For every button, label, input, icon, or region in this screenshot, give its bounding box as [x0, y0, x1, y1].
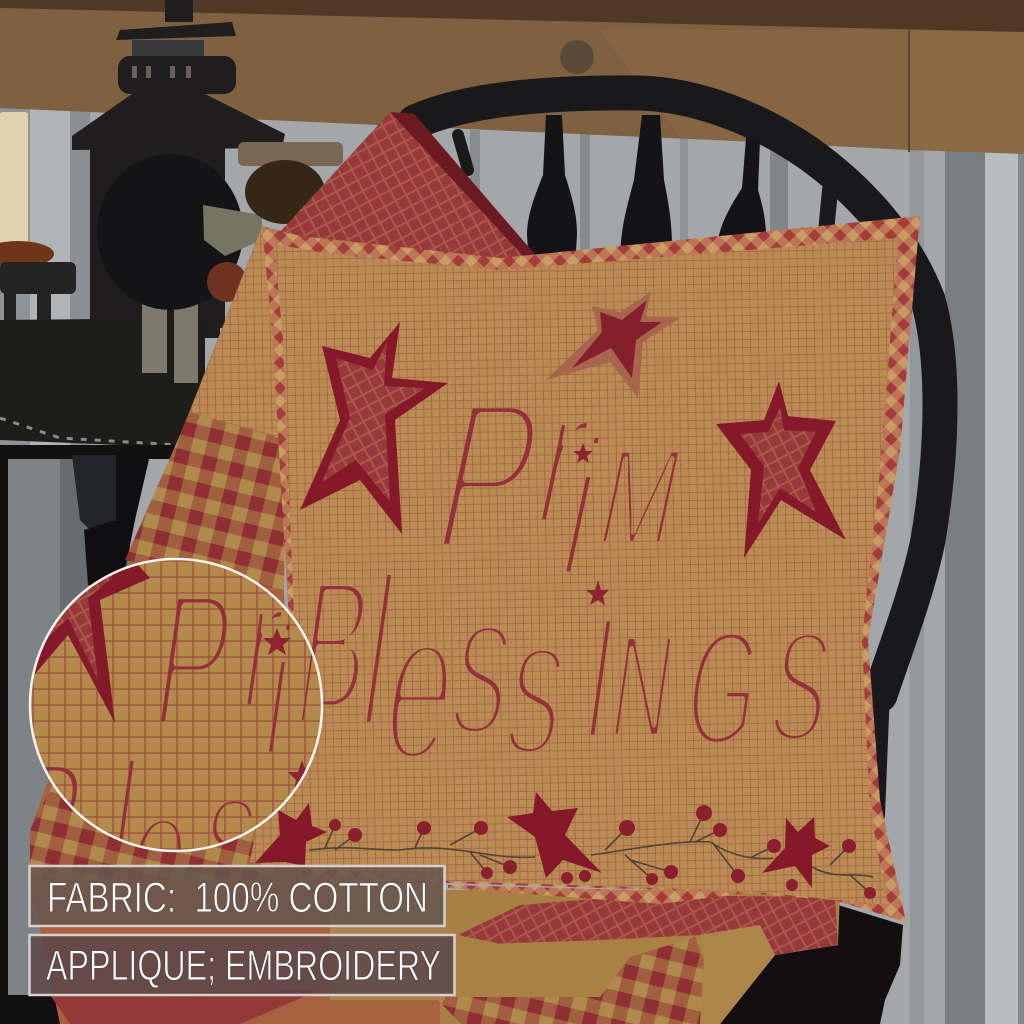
magnified stitched word: Prim: l	[292, 629, 322, 746]
label: fabric: FABRIC: 100% COTTON	[47, 874, 428, 922]
magnified stitched word: Blessings: s	[189, 727, 273, 939]
stitched heading: Blessings: B	[286, 542, 384, 751]
candle	[0, 112, 54, 267]
stitched heading: Prim: r	[519, 345, 610, 568]
star: bottom left	[255, 803, 327, 866]
quilt: red plaid fold	[458, 895, 838, 955]
back pillow: red plaid	[280, 112, 538, 258]
star: upper left	[300, 322, 448, 534]
label: applique and embroidery	[30, 935, 454, 995]
label: fabric	[30, 866, 444, 926]
stitched heading: Prim: i	[544, 397, 620, 620]
main pillow	[250, 216, 920, 922]
magnified stitched word: Prim: r	[230, 537, 297, 751]
quilt: tan right lobe	[700, 925, 775, 1024]
pillow checked border	[262, 216, 920, 922]
star: bottom centre	[507, 792, 602, 878]
chair seat	[720, 905, 903, 1024]
stitched heading: Blessings: l	[348, 529, 409, 775]
wood beam	[0, 0, 1024, 154]
stitched heading: Prim: M	[586, 419, 695, 575]
chair back	[415, 93, 940, 815]
pillow bottom checked hem	[448, 885, 747, 904]
stitched heading: Blessings: I	[572, 579, 628, 779]
magnified stitched word: Blessings: l	[94, 720, 151, 943]
star: small centre	[573, 443, 593, 463]
quilt draped behind	[30, 226, 840, 1024]
stitched heading: Blessings: s	[439, 546, 529, 781]
stitched heading: Blessings: e	[371, 561, 473, 807]
stitched heading: Blessings: G	[675, 597, 771, 781]
star: bottom right	[762, 817, 830, 888]
star: top centre	[546, 292, 680, 398]
black wool sheep	[97, 142, 343, 383]
magnified star	[30, 556, 150, 723]
pillow front fabric	[250, 238, 898, 905]
stitched heading: Prim: P	[417, 356, 562, 597]
berry vine	[309, 805, 876, 899]
magnifier inset	[28, 558, 324, 852]
star: upper right	[716, 381, 846, 558]
magnified stitched word: Prim: i	[252, 586, 306, 798]
stitched heading: Blessings: s	[758, 553, 849, 788]
label: applique and embroidery: APPLIQUE; EMBROIDERY	[46, 942, 441, 990]
star: small over I	[586, 580, 609, 605]
quilt: tan centre lobe	[440, 937, 695, 997]
magnified stitched word: Prim: P	[142, 551, 246, 768]
stitched heading: Blessings: s	[494, 571, 582, 799]
quilt: check band	[435, 937, 704, 1024]
table	[0, 318, 205, 1024]
chair spindles	[527, 115, 766, 265]
stitched heading: Blessings: N	[601, 603, 684, 770]
magnified stitched word: Blessings: e	[114, 747, 204, 959]
small stool	[0, 262, 76, 354]
lantern	[72, 0, 285, 338]
